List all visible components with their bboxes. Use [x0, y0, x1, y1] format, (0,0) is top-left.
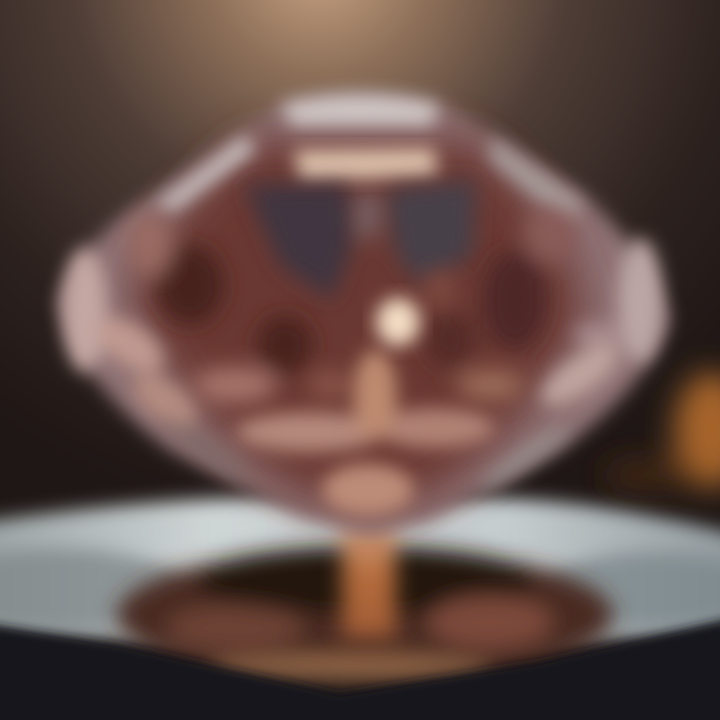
- diamond core: red-brown pavilion: [130, 140, 585, 515]
- facets: pale rim highlights: [63, 94, 662, 496]
- diamond outline: translucent rim: [58, 96, 670, 535]
- highlight: central sparkle: [376, 298, 420, 346]
- beam: orange refraction in the pool: [342, 520, 396, 638]
- facets: table window highlight: [294, 148, 438, 182]
- glow: amber light at right: [602, 372, 720, 491]
- diamond: body of the gem: [58, 94, 670, 535]
- facets: pale lower pavilion band: [236, 350, 495, 516]
- pedestal: dark front edges: [0, 618, 720, 720]
- facets: mottled internal reflections: [128, 207, 576, 403]
- table: reflective pale surface: [0, 497, 720, 640]
- reflection: copper pool on the table: [117, 546, 613, 681]
- facets: grey-violet crown shadows: [245, 180, 476, 300]
